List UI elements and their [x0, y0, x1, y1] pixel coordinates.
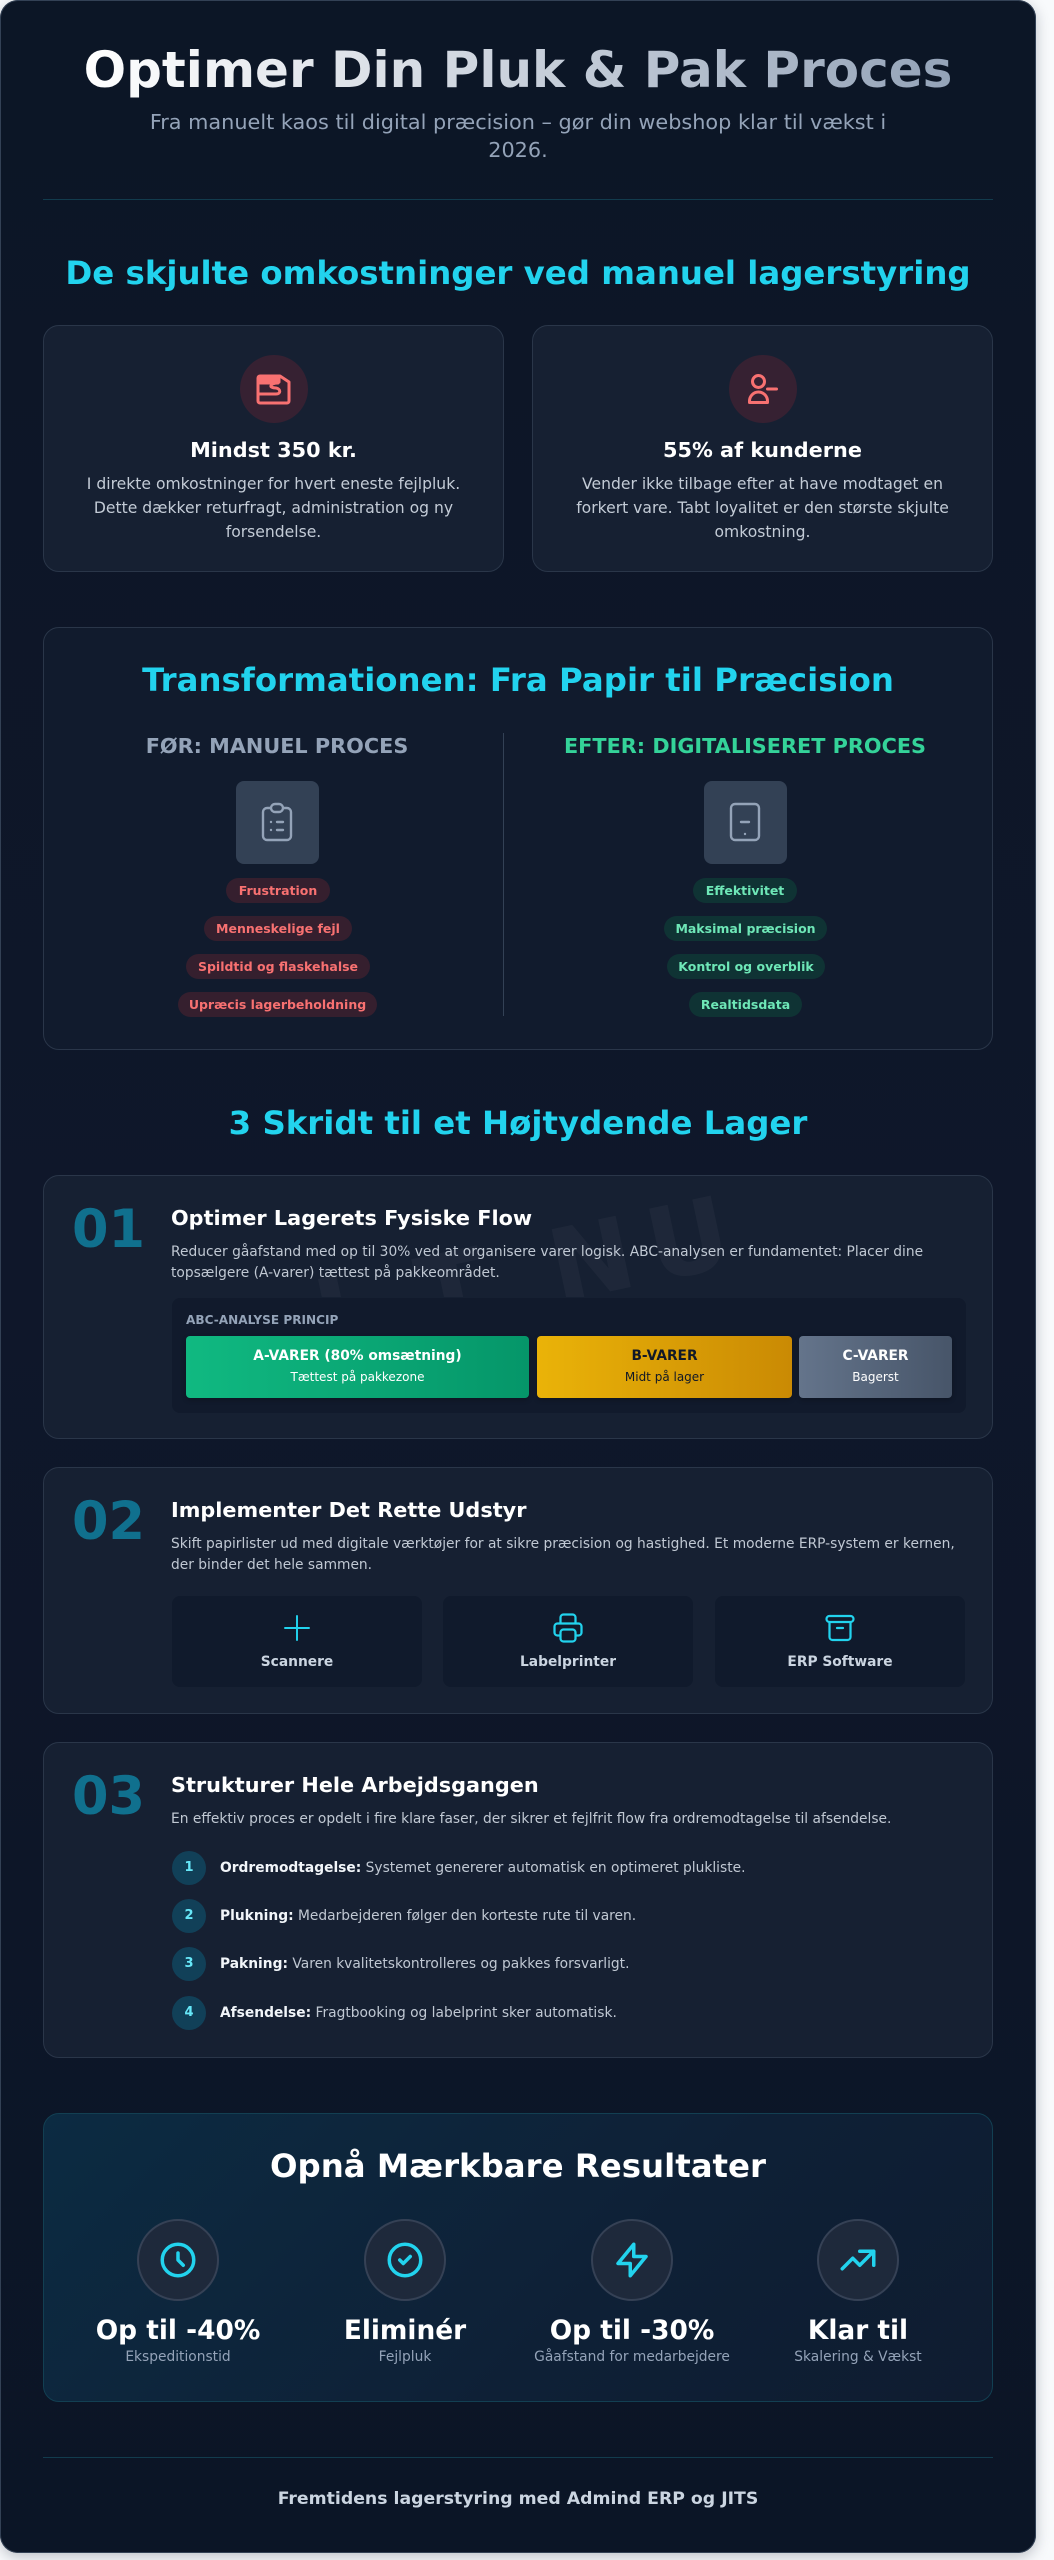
card text: omkostning. [715, 523, 810, 541]
card text [87, 475, 460, 541]
card text: I direkte omkostninger for hvert eneste fejlpluk. [87, 475, 460, 493]
card text: Vender ikke tilbage efter at have modtaget en [582, 475, 943, 493]
subtitle: 2026. [488, 138, 548, 162]
icon: lightning [591, 2219, 673, 2301]
B bar: Midt på lager [625, 1370, 704, 1384]
pills: after: Realtidsdata [701, 997, 790, 1012]
card text: forsendelse. [226, 523, 321, 541]
panel: transformation [43, 627, 993, 1050]
B bar [537, 1336, 792, 1398]
icon: clipboard [236, 781, 319, 864]
icon: user remove [729, 355, 797, 423]
C bar: C-VARER [842, 1348, 909, 1364]
pills: before [178, 878, 377, 1017]
icon: money document [240, 355, 308, 423]
result: growth: Klar til [808, 2315, 908, 2346]
card text: Dette dækker returfragt, administration og ny [94, 499, 453, 517]
A bar: Tættest på pakkezone [291, 1370, 424, 1384]
result: growth [794, 2219, 922, 2365]
heading: hidden costs: De skjulte omkostninger ved manuel lagerstyring [65, 254, 971, 292]
step text: Skift papirlister ud med digitale værktøjer for at sikre præcision og hastighed. Et moderne ERP-system er kernen, [171, 1536, 955, 1552]
pills: after: Maksimal præcision [675, 921, 816, 936]
heading: Opnå Mærkbare Resultater [270, 2147, 766, 2185]
tool: label printer [443, 1596, 693, 1687]
phase 3: Pakning: Varen kvalitetskontrolleres og pakkes forsvarligt. [220, 1956, 629, 1972]
subtitle [150, 110, 886, 162]
icon: trend [817, 2219, 899, 2301]
phase 1 [172, 1851, 746, 1885]
result: errors: Eliminér [344, 2315, 466, 2346]
pills: after [664, 878, 827, 1017]
footer: Fremtidens lagerstyring med Admind ERP og JITS [278, 2489, 758, 2509]
step title: Strukturer Hele Arbejdsgangen [171, 1773, 539, 1797]
icon: check [364, 2219, 446, 2301]
panel: step 02 [43, 1467, 993, 1714]
step title: Optimer Lagerets Fysiske Flow [171, 1206, 532, 1230]
before heading: FØR: MANUEL PROCES [146, 734, 408, 758]
result: time [96, 2219, 260, 2365]
result: time: Ekspeditionstid [125, 2349, 231, 2365]
card text: forkert vare. Tabt loyalitet er den største skjulte [576, 499, 949, 517]
result: errors [344, 2219, 466, 2365]
heading: 3 steps: 3 Skridt til et Højtydende Lager [229, 1104, 807, 1142]
step text [171, 1243, 923, 1281]
pills: before: Frustration [239, 883, 317, 898]
step text [171, 1536, 955, 1573]
tool: ERP software: ERP Software [787, 1654, 893, 1670]
phase 3 [172, 1947, 629, 1981]
diagram label: ABC-ANALYSE PRINCIP [186, 1313, 338, 1327]
A bar: A-VARER (80% omsætning) [253, 1348, 462, 1364]
result: walking distance: Op til -30% [550, 2315, 714, 2346]
pills: after: Kontrol og overblik [678, 959, 814, 974]
card text [576, 475, 949, 541]
result: time: Op til -40% [96, 2315, 260, 2346]
phase 4: 4 [184, 2005, 194, 2020]
phase 1: 1 [184, 1860, 194, 1875]
step number: 03 [72, 1766, 145, 1827]
icon: clock [137, 2219, 219, 2301]
phase 2: 2 [184, 1908, 194, 1923]
phase 4 [172, 1996, 617, 2030]
panel: 55 percent of customers [532, 325, 993, 572]
step title: Implementer Det Rette Udstyr [171, 1498, 526, 1522]
step text: der binder det hele sammen. [171, 1557, 372, 1573]
pills: before: Spildtid og flaskehalse [198, 959, 358, 974]
ABC diagram [172, 1298, 966, 1413]
phase 2 [172, 1899, 636, 1933]
phase 1: Ordremodtagelse: Systemet genererer automatisk en optimeret plukliste. [220, 1860, 746, 1876]
phase 3: 3 [184, 1956, 194, 1971]
A bar [186, 1336, 529, 1398]
panel: results [43, 2113, 993, 2402]
result: growth: Skalering & Vækst [794, 2349, 922, 2365]
tool: scanners [172, 1596, 422, 1687]
phase 2: Plukning: Medarbejderen følger den korteste rute til varen. [220, 1908, 636, 1924]
result: errors: Fejlpluk [379, 2349, 431, 2365]
step number: 02 [72, 1491, 145, 1552]
title: Optimer Din Pluk & Pak Proces [84, 41, 952, 99]
subtitle: Fra manuelt kaos til digital præcision – gør din webshop klar til vækst i [150, 110, 886, 134]
pills: before: Upræcis lagerbeholdning [189, 997, 366, 1012]
step text: topsælgere (A-varer) tættest på pakkeområdet. [171, 1265, 500, 1281]
panel: cost 350 kr [43, 325, 504, 572]
pills: after: Effektivitet [706, 883, 784, 898]
card title: 55% af kunderne [663, 438, 862, 462]
after heading: EFTER: DIGITALISERET PROCES [564, 734, 926, 758]
panel: step 01 [43, 1175, 993, 1439]
B bar: B-VARER [631, 1348, 698, 1364]
tool: scanners: Scannere [261, 1654, 333, 1670]
tool: label printer: Labelprinter [520, 1654, 616, 1670]
step text: Reducer gåafstand med op til 30% ved at organisere varer logisk. ABC-analysen er fundamentet: Placer dine [171, 1244, 923, 1260]
heading: Transformationen: Fra Papir til Præcision [142, 661, 894, 699]
result: walking distance: Gåafstand for medarbejdere [534, 2349, 730, 2365]
panel: step 03 [43, 1742, 993, 2058]
card title: Mindst 350 kr. [190, 438, 357, 462]
phase 4: Afsendelse: Fragtbooking og labelprint sker automatisk. [220, 2005, 617, 2021]
result: walking distance [534, 2219, 730, 2365]
step text: En effektiv proces er opdelt i fire klare faser, der sikrer et fejlfrit flow fra ordremodtagelse til afsendelse. [171, 1811, 891, 1827]
pills: before: Menneskelige fejl [216, 921, 340, 936]
C bar: Bagerst [852, 1370, 899, 1384]
icon: tablet [704, 781, 787, 864]
tool: ERP software [715, 1596, 965, 1687]
step number: 01 [72, 1199, 145, 1260]
C bar [799, 1336, 952, 1398]
